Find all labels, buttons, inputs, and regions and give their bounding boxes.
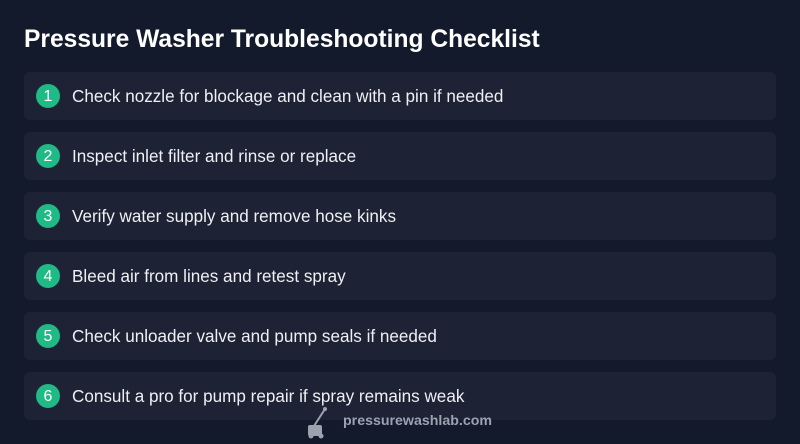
item 2	[24, 132, 776, 180]
item 2: 2	[44, 148, 52, 165]
item 3	[24, 192, 776, 240]
item 3: Verify water supply and remove hose kinks	[72, 207, 396, 226]
item 6: Consult a pro for pump repair if spray remains weak	[72, 387, 464, 406]
footer brand	[308, 407, 492, 438]
icon: pressure washer	[308, 407, 327, 438]
footer text: pressurewashlab.com	[343, 413, 492, 429]
item 1: Check nozzle for blockage and clean with a pin if needed	[72, 87, 503, 106]
item 1: 1	[44, 88, 52, 105]
item 5: Check unloader valve and pump seals if needed	[72, 327, 437, 346]
item 6	[24, 372, 776, 420]
item 4: Bleed air from lines and retest spray	[72, 267, 346, 286]
item 4	[24, 252, 776, 300]
item 2: Inspect inlet filter and rinse or replace	[72, 147, 356, 166]
item 4: 4	[44, 268, 52, 285]
item 3: 3	[44, 208, 52, 225]
item 6: 6	[44, 388, 52, 405]
title: Pressure Washer Troubleshooting Checklist	[24, 26, 540, 53]
item 5: 5	[44, 328, 52, 345]
item 1	[24, 72, 776, 120]
item 5	[24, 312, 776, 360]
